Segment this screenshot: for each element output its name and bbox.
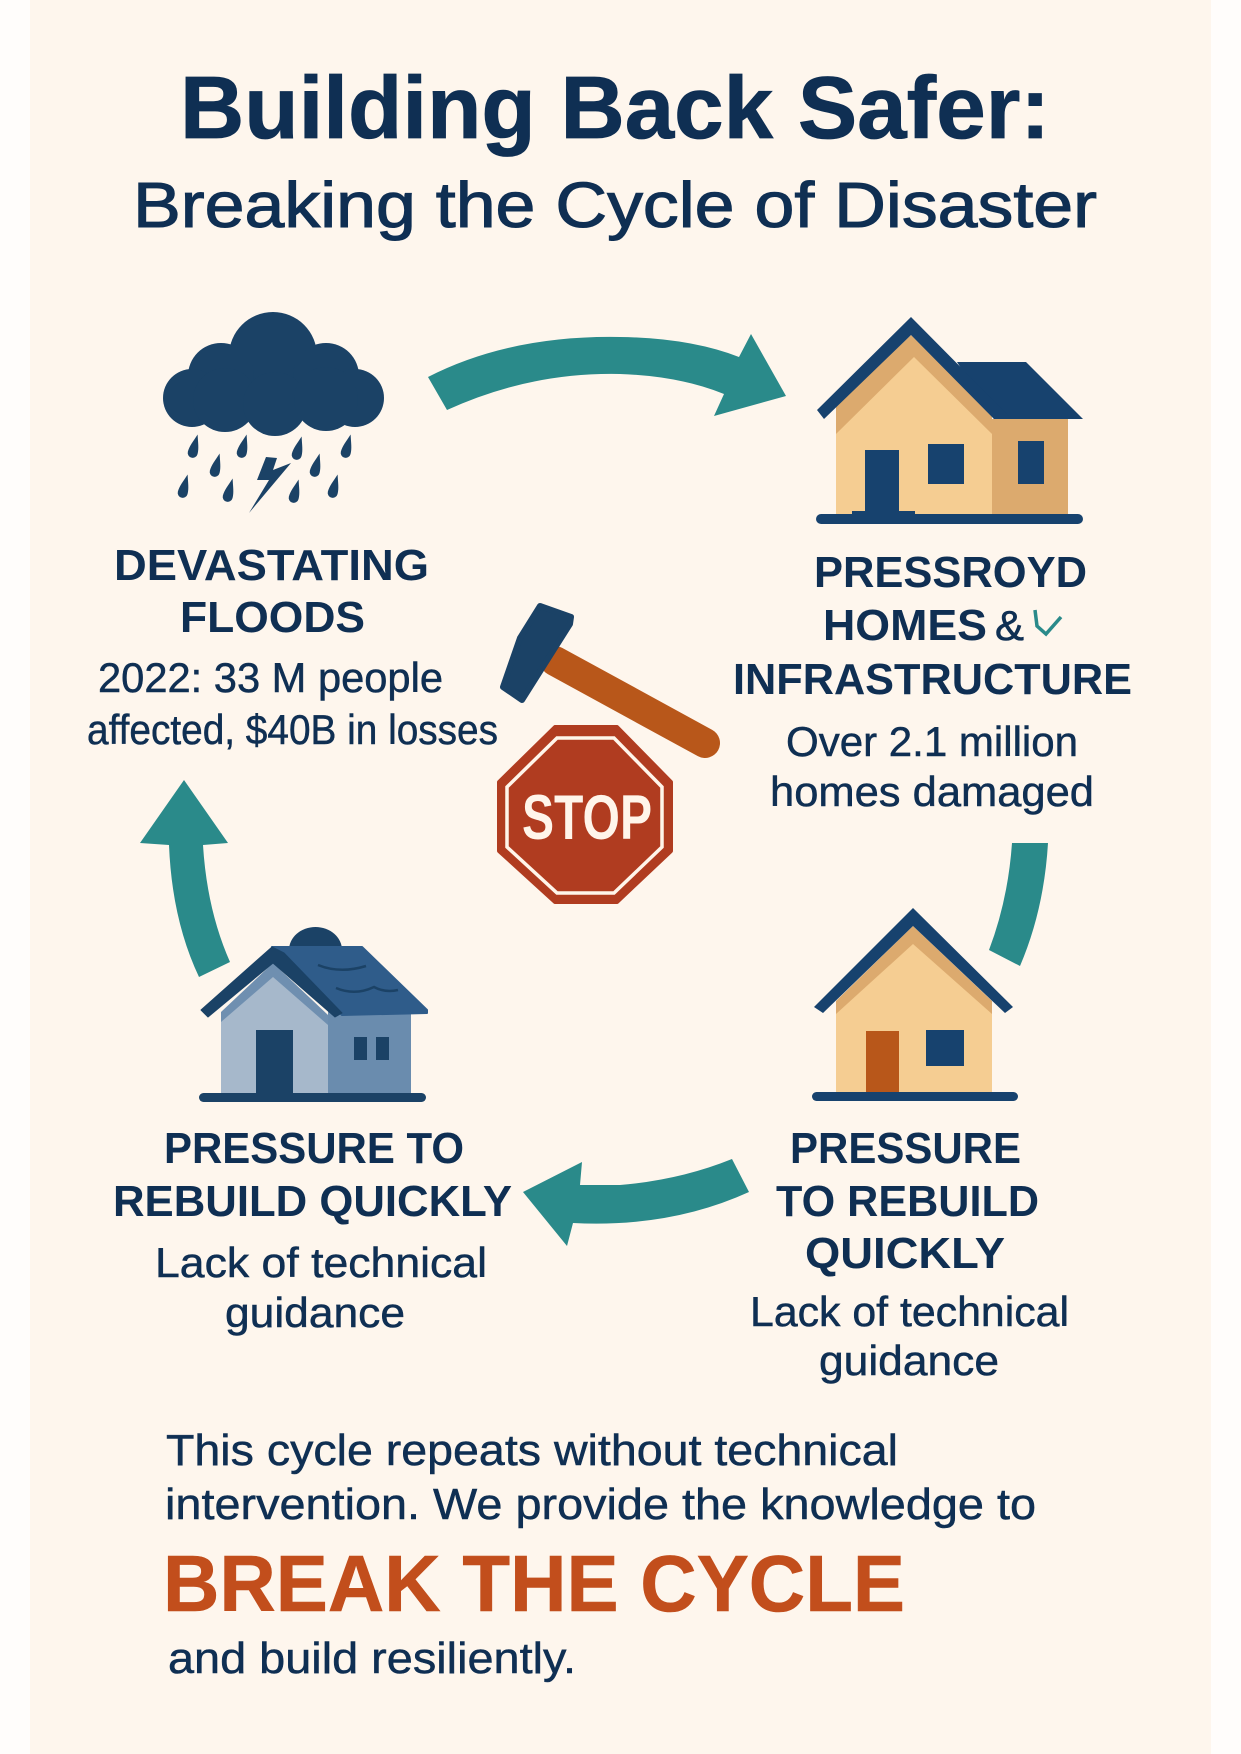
description: guidance bbox=[225, 1289, 405, 1336]
heading: INFRASTRUCTURE bbox=[733, 655, 1132, 704]
heading: QUICKLY bbox=[805, 1229, 1005, 1278]
icon: stop sign bbox=[499, 727, 671, 902]
body text: This cycle repeats without technical bbox=[166, 1426, 898, 1475]
heading: DEVASTATING bbox=[114, 541, 429, 590]
description: affected, $40B in losses bbox=[87, 706, 498, 753]
icon: large house bbox=[816, 317, 1083, 524]
description bbox=[155, 1239, 487, 1336]
icon: hammer breaking the cycle bbox=[503, 606, 705, 743]
description bbox=[87, 654, 498, 753]
step: devastating floods bbox=[87, 312, 498, 753]
arrow: damaged homes to rebuild bbox=[989, 843, 1048, 966]
heading bbox=[776, 1124, 1039, 1278]
heading bbox=[113, 1124, 512, 1226]
arrow: floods to damaged homes bbox=[428, 334, 786, 416]
heading: REBUILD QUICKLY bbox=[113, 1177, 512, 1226]
heading: PRESSROYD bbox=[814, 548, 1087, 597]
step: damaged homes and infrastructure bbox=[733, 317, 1132, 815]
description: Over 2.1 million bbox=[786, 718, 1078, 765]
description: guidance bbox=[819, 1337, 999, 1384]
main title: Building Back Safer: bbox=[180, 58, 1050, 157]
arrow: rebuild left to floods bbox=[140, 780, 230, 977]
closing message bbox=[163, 1426, 1036, 1683]
step: pressure to rebuild, right bbox=[750, 908, 1069, 1384]
heading: PRESSURE TO bbox=[164, 1124, 464, 1173]
heading bbox=[733, 548, 1132, 704]
description: Lack of technical bbox=[155, 1239, 487, 1286]
body text: intervention. We provide the knowledge to bbox=[165, 1480, 1036, 1529]
heading: TO REBUILD bbox=[776, 1177, 1039, 1226]
heading: FLOODS bbox=[180, 593, 365, 642]
icon: storm cloud with rain and lightning bbox=[163, 312, 384, 513]
body text bbox=[165, 1426, 1036, 1529]
description bbox=[770, 718, 1094, 815]
arrow: rebuild right to rebuild left bbox=[523, 1159, 749, 1246]
description: 2022: 33 M people bbox=[98, 654, 443, 701]
heading: PRESSURE bbox=[790, 1124, 1021, 1173]
icon: small tan house bbox=[812, 908, 1018, 1101]
icon: blue house bbox=[199, 927, 427, 1102]
closing line: and build resiliently. bbox=[168, 1634, 576, 1683]
title block bbox=[133, 58, 1097, 241]
heading: HOMES bbox=[823, 601, 987, 650]
description: homes damaged bbox=[770, 768, 1094, 815]
heading bbox=[114, 541, 429, 642]
icon: stop sign: STOP bbox=[522, 783, 652, 853]
description: Lack of technical bbox=[750, 1288, 1069, 1335]
icon: small teal check mark bbox=[1035, 610, 1061, 634]
description bbox=[750, 1288, 1069, 1384]
step: pressure to rebuild, left bbox=[113, 927, 512, 1336]
call to action: BREAK THE CYCLE bbox=[163, 1539, 905, 1628]
heading: & bbox=[995, 602, 1024, 649]
subtitle: Breaking the Cycle of Disaster bbox=[133, 169, 1097, 241]
